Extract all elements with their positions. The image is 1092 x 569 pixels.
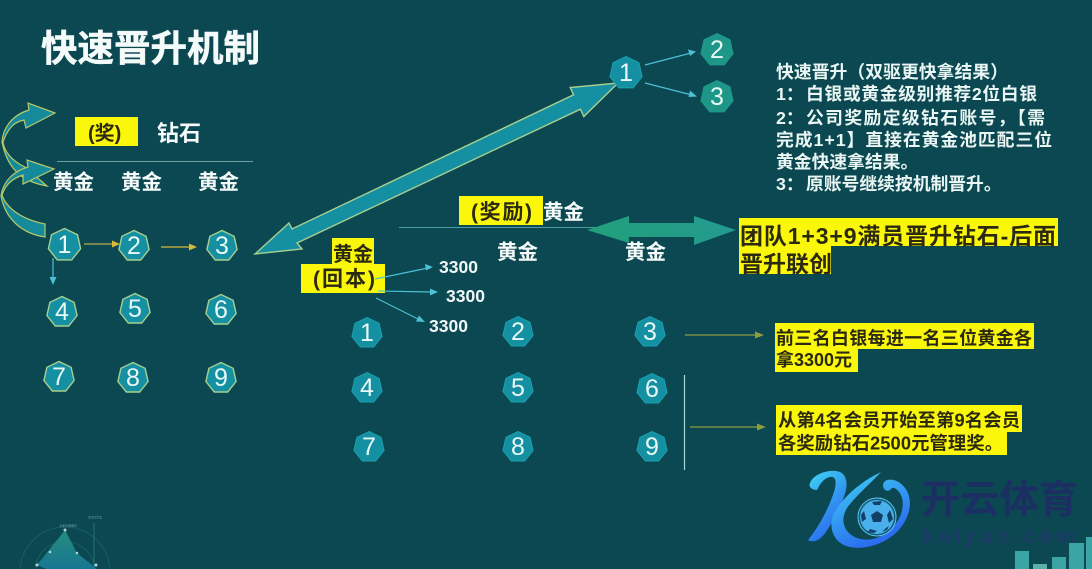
- node 5: 5: [511, 374, 525, 402]
- yellow label: 奖励: (奖励): [471, 201, 532, 224]
- node 9: 9: [214, 364, 228, 392]
- node 8: [503, 432, 533, 461]
- watermark logo: [808, 471, 1078, 548]
- node 8: 8: [511, 433, 525, 461]
- text block: fast promotion rules: [776, 61, 1052, 194]
- panel: gold tier tree: [301, 196, 667, 461]
- node 4: [352, 372, 382, 402]
- node 6: [206, 294, 236, 324]
- gold label 3: 黄金: [625, 240, 666, 264]
- node 9: [206, 362, 236, 392]
- node 1: 1: [58, 231, 71, 259]
- title: 快速晋升机制: [41, 28, 260, 69]
- node 6: 6: [214, 296, 228, 324]
- callout: top three: 前三名白银每进一名三位黄金各: [776, 328, 1032, 348]
- arrow to callout manager award: [690, 424, 766, 430]
- amounts: [429, 257, 485, 336]
- text block: fast promotion rules: 3：: [776, 174, 804, 194]
- node 2: [503, 316, 533, 346]
- panel: top right branch: [610, 34, 733, 112]
- amounts: 3300: [439, 257, 478, 277]
- gold labels: 黄金: [198, 170, 239, 194]
- callout: team full: 晋升联创: [740, 251, 832, 277]
- node 1: 1: [360, 319, 374, 347]
- node 1: [352, 318, 382, 347]
- curved arrow upper: [2, 103, 55, 186]
- node 2: [119, 230, 149, 260]
- radar chart decoration: DEGREE: [60, 523, 77, 528]
- node 1: [48, 228, 81, 260]
- callout: team full: 团队1+3+9满员晋升钻石-后面: [740, 223, 1056, 249]
- watermark brand: 开云体育: [921, 479, 1078, 522]
- node 1: 1: [619, 59, 633, 87]
- node 3: [207, 230, 237, 260]
- node 4: [47, 296, 77, 326]
- callout: top three: [775, 323, 1034, 372]
- node 5: 5: [128, 295, 142, 323]
- arrow: large double arrow: [255, 83, 618, 254]
- arrow to 2: [645, 50, 696, 65]
- node 3: [635, 316, 665, 346]
- logo sweep and swirl: [831, 472, 910, 548]
- text block: fast promotion rules: 完成1+1】直接在黄金池匹配三位: [776, 129, 1052, 150]
- node 6: [637, 374, 667, 403]
- gold label 2: 黄金: [497, 240, 538, 264]
- arrow: green double arrow: [587, 216, 736, 245]
- arrow 1 to 2: [84, 240, 120, 248]
- text block: fast promotion rules: 原账号继续按机制晋升。: [806, 173, 1002, 194]
- node 2: 2: [127, 232, 141, 260]
- curved arrow lower: [1, 160, 54, 237]
- gold labels: 黄金: [53, 170, 94, 194]
- watermark url: kaiyun.com: [923, 525, 1075, 548]
- node 4: 4: [55, 298, 69, 326]
- heading gold: 黄金: [543, 200, 584, 224]
- arrow 2 to 3: [161, 244, 197, 250]
- yellow label: 奖: (奖): [88, 122, 121, 145]
- node 8: 8: [126, 364, 140, 392]
- arrow to 3: [645, 83, 697, 97]
- callout: team full: [739, 218, 1058, 277]
- logo letter K stem: [808, 471, 847, 541]
- node 3: 3: [643, 318, 657, 346]
- node 7: 7: [52, 363, 66, 391]
- node 9: [637, 432, 667, 461]
- text block: fast promotion rules: 1：: [776, 84, 804, 104]
- yellow label: gold: 黄金: [333, 242, 373, 266]
- amounts: 3300: [429, 316, 468, 336]
- heading: diamond: 钻石: [157, 121, 201, 146]
- arrow 1 to 4: [50, 258, 56, 285]
- text block: fast promotion rules: 快速晋升（双驱更快拿结果）: [776, 61, 1008, 82]
- callout: top three: 拿3300元: [776, 349, 852, 370]
- node 6: 6: [645, 375, 659, 403]
- gold labels: [53, 170, 239, 194]
- radar chart decoration: [20, 515, 110, 569]
- yellow label: 回本: [301, 264, 385, 293]
- yellow label: 奖: [75, 117, 138, 146]
- node 7: [44, 362, 74, 391]
- panel: diamond tier tree: [1, 103, 253, 392]
- node 7: 7: [362, 433, 376, 461]
- icon: football: [858, 498, 896, 536]
- callout: manager award: [776, 405, 1022, 455]
- text block: fast promotion rules: 黄金快速拿结果。: [776, 151, 918, 172]
- radar chart decoration: STATS: [88, 515, 102, 520]
- node 8: [118, 362, 148, 392]
- node 4: 4: [360, 374, 374, 402]
- text block: fast promotion rules: 公司奖励定级钻石账号，【需: [806, 107, 1045, 128]
- amounts: 3300: [446, 286, 485, 306]
- text block: fast promotion rules: 2：: [776, 108, 804, 128]
- yellow label: 回本: (回本): [313, 268, 375, 291]
- node 9: 9: [645, 433, 659, 461]
- arrow to callout top three: [685, 332, 764, 338]
- node 5: [503, 372, 533, 402]
- node 3: 3: [215, 232, 229, 260]
- node 7: [354, 432, 384, 461]
- yellow label: 奖励: [459, 196, 543, 225]
- bracket line: [684, 375, 686, 470]
- node 5: [120, 294, 150, 323]
- text block: fast promotion rules: 白银或黄金级别推荐2位白银: [806, 83, 1037, 104]
- node 3: 3: [710, 83, 724, 111]
- callout: manager award: 从第4名会员开始至第9名会员: [778, 410, 1020, 430]
- bar decoration: [1015, 537, 1092, 569]
- arrows to 3300: [375, 264, 438, 322]
- callout: manager award: 各奖励钻石2500元管理奖。: [778, 432, 1003, 454]
- node 2: 2: [710, 36, 724, 64]
- node 2: 2: [511, 318, 525, 346]
- gold labels: 黄金: [121, 170, 162, 194]
